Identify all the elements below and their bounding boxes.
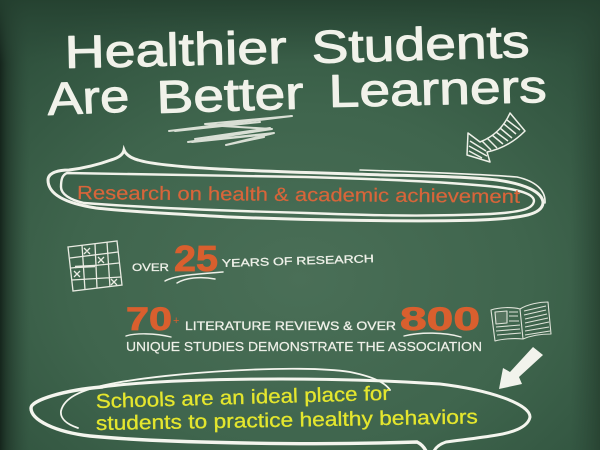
banner: research	[48, 150, 545, 221]
bubble chalk outline	[31, 369, 530, 450]
title: Healthier	[64, 21, 287, 78]
title: Better	[156, 66, 304, 123]
icon: calendar grid	[68, 241, 122, 291]
banner text: Research on health & academic achievement	[77, 183, 521, 208]
scribble under title	[169, 116, 292, 145]
underline scribble	[165, 272, 223, 283]
stat: 70+ literature reviews and 800 studies: 70	[126, 301, 172, 337]
bubble text: students to practice healthy behaviors	[96, 406, 478, 435]
stat: over 25 years: OVER	[132, 262, 169, 274]
title: Learners	[328, 60, 547, 117]
banner chalk outline	[48, 150, 545, 221]
stat: 70+ literature reviews and 800 studies: LITERATURE REVIEWS & OVER	[185, 319, 396, 333]
bubble text	[96, 383, 478, 435]
stat: 70+ literature reviews and 800 studies	[126, 301, 482, 354]
icon: open book	[491, 302, 551, 341]
stat: over 25 years	[132, 238, 374, 283]
title: Students	[311, 15, 530, 73]
bubble text: Schools are an ideal place for	[96, 383, 390, 413]
stat: 70+ literature reviews and 800 studies: UNIQUE STUDIES DEMONSTRATE THE ASSOCIATION	[126, 340, 482, 354]
icon: hatched arrow pointing to banner	[467, 113, 525, 162]
speech bubble	[31, 369, 530, 450]
underline scribbles	[126, 333, 461, 337]
stat: over 25 years: YEARS OF RESEARCH	[222, 253, 374, 270]
stat: over 25 years: 25	[174, 238, 218, 279]
title	[46, 15, 547, 125]
title: Are	[46, 69, 130, 125]
icon: solid white arrow	[499, 347, 543, 389]
stat: 70+ literature reviews and 800 studies: +	[173, 315, 179, 327]
stat: 70+ literature reviews and 800 studies: 800	[400, 301, 480, 337]
